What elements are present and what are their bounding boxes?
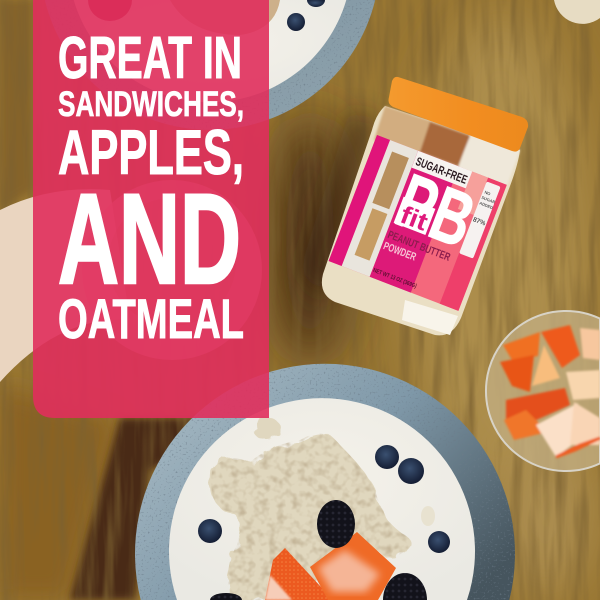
label: magenta field xyxy=(370,151,459,293)
label: no sugar panel xyxy=(459,181,501,259)
headline line: apples: APPLES, xyxy=(58,118,244,188)
pink text panel xyxy=(33,0,269,418)
headline line: sandwiches: SANDWICHES, xyxy=(58,85,244,124)
raspberry xyxy=(88,0,132,21)
label: no sugar panel: ADDED xyxy=(479,200,494,210)
label: no sugar panel: NO xyxy=(484,190,491,196)
icon: blackberries xyxy=(210,500,427,600)
label: product name: PEANUT BUTTER xyxy=(386,229,452,264)
label: sugar-free banner xyxy=(412,151,472,188)
label: sugar-free banner: SUGAR-FREE xyxy=(414,154,469,187)
headline line: great in: GREAT IN xyxy=(58,25,242,91)
label: no sugar panel: SUGAR xyxy=(481,195,496,205)
label: net weight: NET WT 13 OZ (369G) xyxy=(372,268,417,290)
powder at top of jar xyxy=(374,106,520,186)
label xyxy=(329,135,507,311)
label: coral edge xyxy=(440,178,507,311)
ceramic jar corner at top right xyxy=(554,0,600,24)
label: PB logo xyxy=(386,158,486,264)
label: base xyxy=(329,135,507,311)
label: almond photo panel xyxy=(342,140,418,277)
label: powder: POWDER xyxy=(382,240,418,264)
main oatmeal bowl xyxy=(135,364,515,600)
middle bowl under panel xyxy=(82,180,262,360)
napkin xyxy=(0,189,130,382)
cap xyxy=(388,77,528,152)
small glass bowl of strawberries xyxy=(486,311,600,471)
label: left strip xyxy=(329,135,390,266)
label: PB logo: PB xyxy=(386,158,486,264)
powder at bottom of jar xyxy=(402,300,458,335)
jar of PBfit powder xyxy=(300,77,528,335)
icon: second blueberry in top bowl xyxy=(307,0,325,7)
label: no sugar panel: 87% xyxy=(472,216,487,228)
headline xyxy=(58,25,244,350)
icon: strawberry slices xyxy=(265,532,396,600)
headline line: and: AND xyxy=(58,168,241,311)
headline line: oatmeal: OATMEAL xyxy=(58,287,244,350)
label: pale salmon top xyxy=(458,172,488,215)
icon: blueberry in top bowl xyxy=(287,13,305,31)
oatmeal xyxy=(211,417,435,600)
oats in top bowl xyxy=(170,0,280,35)
jar shadow xyxy=(300,110,378,300)
jar body xyxy=(322,106,520,335)
icon: blueberries xyxy=(198,445,450,553)
label: PB logo: fit xyxy=(396,201,432,237)
icon: strawberry pieces xyxy=(500,325,600,457)
top bowl xyxy=(45,0,375,130)
